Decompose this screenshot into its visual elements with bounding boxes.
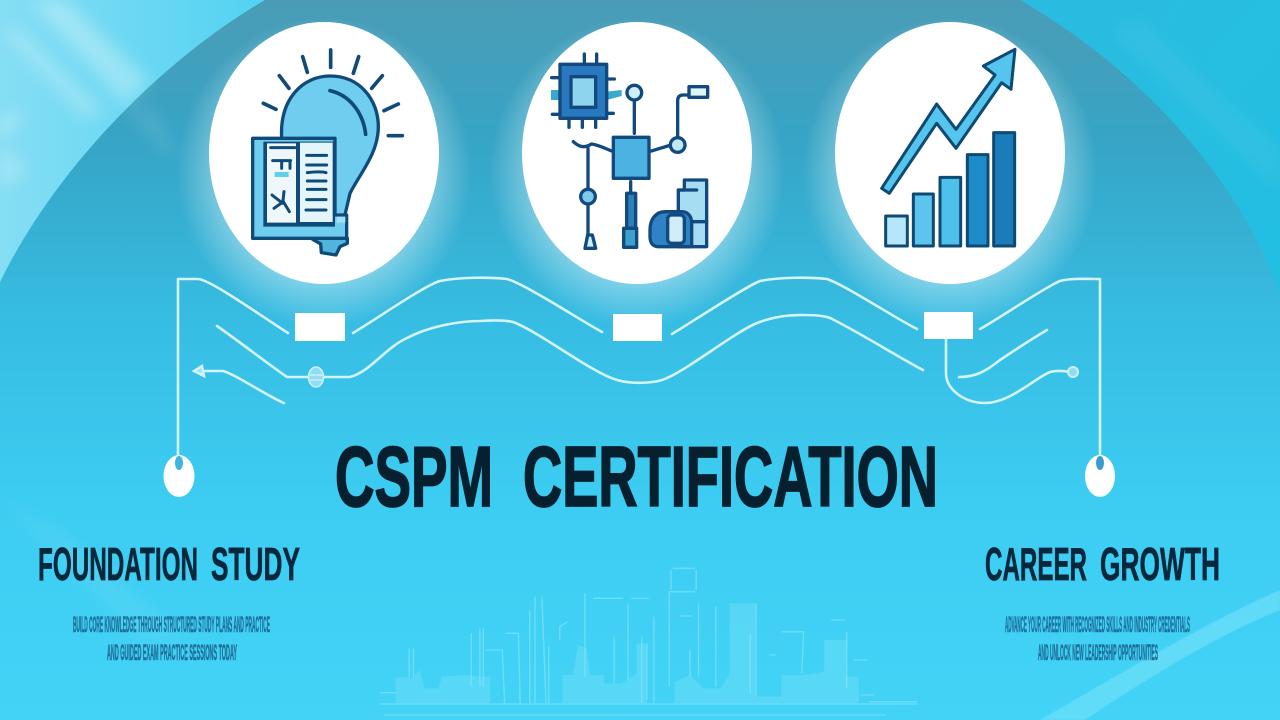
title xyxy=(335,430,938,525)
icon: chip and circuit tools xyxy=(551,54,708,248)
connector box 1 xyxy=(295,313,345,341)
connector box 2 xyxy=(613,314,662,341)
icon: small lock xyxy=(308,367,324,387)
connector network xyxy=(178,278,1100,455)
icon: small arrowhead xyxy=(194,366,204,376)
icon: lightbulb and open book xyxy=(253,50,402,255)
infographic canvas: BUILD CORE KNOWLEDGE THROUGH STRUCTURED STUDY PLANS AND PRACTICE xyxy=(73,612,270,637)
heading: foundation study: FOUNDATION xyxy=(38,538,198,590)
infographic canvas: AND GUIDED EXAM PRACTICE SESSIONS TODAY xyxy=(107,640,237,665)
panel: foundation study circle xyxy=(176,17,472,327)
city skyline xyxy=(380,568,917,715)
title: CERTIFICATION xyxy=(523,430,938,525)
panel: career growth circle xyxy=(802,17,1098,327)
text block: foundation study description xyxy=(73,612,270,665)
title: CSPM xyxy=(335,430,493,525)
heading: career growth: CAREER xyxy=(985,538,1087,590)
icon: rising arrow and bar chart xyxy=(882,49,1015,246)
connector box 3 xyxy=(924,312,973,339)
heading: foundation study: STUDY xyxy=(211,538,300,590)
icon: left mouse node xyxy=(164,455,194,497)
icon: small end node xyxy=(1068,367,1078,377)
text block: career growth description xyxy=(1005,612,1190,665)
panel: technical skills circle xyxy=(489,17,785,327)
icon: right mouse node xyxy=(1085,455,1115,497)
